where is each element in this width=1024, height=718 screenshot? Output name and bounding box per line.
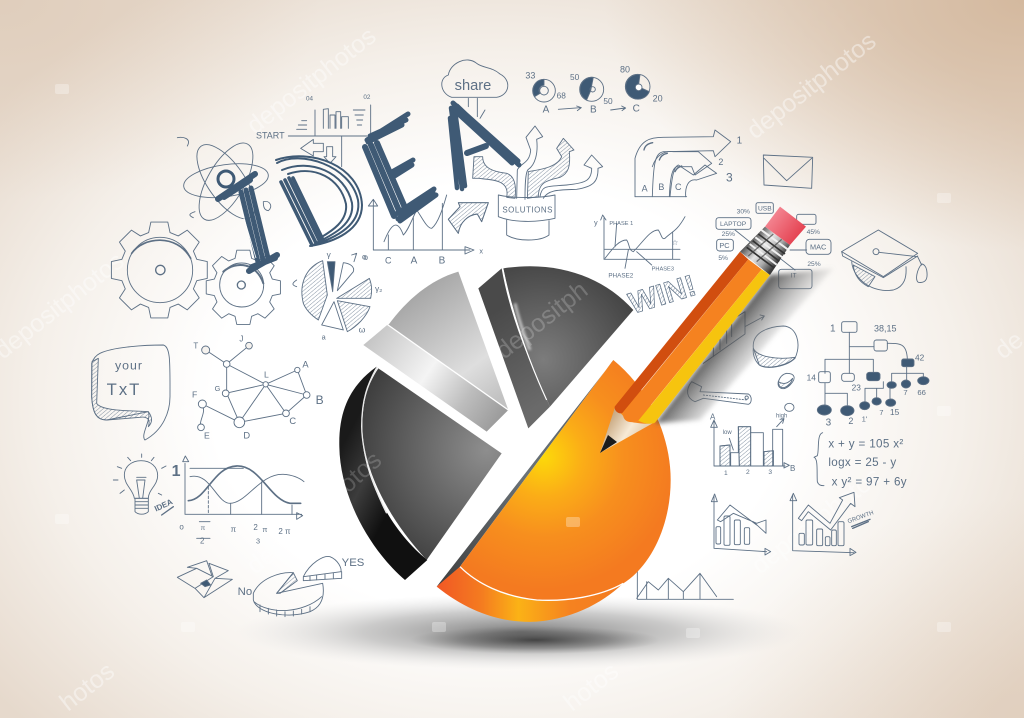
sketch: mountain chart xyxy=(637,570,733,599)
icon: share cloud xyxy=(442,60,508,118)
sketches: speech bubble, network, bulb, curves, box, pie xyxy=(92,335,365,617)
network diagram: C xyxy=(289,416,296,426)
donut charts: 80 xyxy=(620,65,630,75)
slice: orange xyxy=(437,360,671,622)
pie watermarks xyxy=(333,276,593,498)
pie chart xyxy=(339,266,671,622)
laptop labels: IT xyxy=(791,272,797,279)
org chart: 1 xyxy=(830,324,836,335)
donut charts: 20 xyxy=(653,94,663,104)
pie watermarks: otos xyxy=(333,446,387,498)
equations: x + y = 105 x² xyxy=(828,437,904,450)
donut charts: A xyxy=(543,105,550,116)
pie sketch: o xyxy=(363,252,368,262)
sketches: bar charts and equations xyxy=(710,403,907,556)
laptop labels: MAC xyxy=(810,242,827,251)
org chart: 66 xyxy=(917,388,926,397)
slice: dark left xyxy=(339,367,502,580)
hand drawn line chart: o xyxy=(362,252,367,261)
org chart: 23 xyxy=(852,383,861,393)
network diagram xyxy=(192,335,324,440)
bar chart: B xyxy=(790,464,795,473)
org chart: 14 xyxy=(807,373,816,383)
phase chart: PHASE 1 xyxy=(609,221,633,227)
bar chart: high xyxy=(776,413,787,419)
pie sketch: a xyxy=(322,332,327,341)
letter E xyxy=(365,114,436,221)
donut charts: 50 xyxy=(603,96,613,106)
donut charts: 33 xyxy=(525,70,535,80)
laptop labels: 5% xyxy=(718,255,728,262)
hand drawn line chart: x xyxy=(479,246,483,255)
icon: envelope xyxy=(763,155,813,188)
start chart xyxy=(256,94,371,167)
curves chart: 2 π xyxy=(278,527,291,536)
curves chart: π xyxy=(262,525,267,534)
letter D xyxy=(276,156,362,246)
org chart: 15 xyxy=(890,407,900,417)
ground shadow xyxy=(235,594,805,670)
icon: graduation cap xyxy=(842,230,927,291)
growth bar chart xyxy=(790,492,875,556)
equations: logx = 25 - y xyxy=(828,456,896,469)
curves chart: 3 xyxy=(256,536,260,545)
speech bubble: TxT xyxy=(107,380,141,399)
icon: small gear xyxy=(206,250,280,324)
network diagram: L xyxy=(264,369,269,379)
laptop labels: 30% xyxy=(737,208,750,215)
bar chart: low xyxy=(723,430,732,436)
solutions plant: SOLUTIONS xyxy=(502,206,553,215)
icon: cylinder chart xyxy=(753,326,798,389)
icon: ABC arrows: 3 xyxy=(726,171,733,185)
network diagram: T xyxy=(193,341,198,350)
pie watermarks: depositph xyxy=(490,276,593,365)
network diagram: J xyxy=(239,335,243,344)
laptop labels: PC xyxy=(719,241,730,250)
icon: open box xyxy=(177,561,232,598)
org chart xyxy=(807,322,929,429)
network diagram: E xyxy=(204,430,210,440)
org chart: 7 xyxy=(879,408,883,417)
start chart: START xyxy=(256,131,285,141)
equations: x y² = 97 + 6y xyxy=(832,476,907,489)
camera marks xyxy=(55,84,951,638)
org chart: 2 xyxy=(848,416,853,426)
speech bubble xyxy=(92,345,170,440)
sketches: gears, atom, start chart, pie sketch xyxy=(111,94,382,341)
phase chart: y xyxy=(594,218,598,227)
icon: light bulb: 1 xyxy=(172,463,181,480)
solutions plant xyxy=(473,126,603,240)
bar chart: 2 xyxy=(746,469,750,476)
curves chart: π xyxy=(201,525,206,532)
hand drawn line chart: C xyxy=(385,255,392,265)
phase chart xyxy=(594,215,685,279)
laptop labels: 25% xyxy=(722,231,735,238)
curves chart: 2 xyxy=(200,536,205,545)
donut charts xyxy=(525,65,663,116)
slice: light xyxy=(363,272,508,432)
icon: hatched arrow xyxy=(448,203,488,233)
pencil wood and lead xyxy=(600,407,655,453)
pie with slice: No xyxy=(238,586,252,598)
org chart: 3 xyxy=(826,418,832,429)
phase chart: ☆ xyxy=(672,238,678,247)
icon: atom xyxy=(177,135,271,228)
curves chart: π xyxy=(231,525,237,534)
network diagram: A xyxy=(302,359,309,369)
icon: ABC arrows: B xyxy=(658,182,664,192)
laptop labels: 25% xyxy=(807,261,821,268)
watermarks: depositphotos xyxy=(741,27,881,145)
icon: large gear xyxy=(111,222,207,318)
curves chart: o xyxy=(179,522,184,531)
equations xyxy=(814,433,907,489)
letter I xyxy=(218,171,277,271)
pie sketch xyxy=(293,249,382,341)
org chart: 38,15 xyxy=(874,324,896,334)
speech bubble: your xyxy=(115,358,143,372)
org chart: 7 xyxy=(903,388,908,397)
hand drawn line chart xyxy=(362,195,483,266)
laptop labels xyxy=(716,203,831,289)
start chart: 04 xyxy=(306,95,314,102)
icon: ABC arrows: C xyxy=(675,182,682,192)
laptop labels: LAPTOP xyxy=(720,221,747,228)
pencil body xyxy=(615,252,770,424)
bar chart: 3 xyxy=(768,469,772,476)
network diagram: B xyxy=(316,393,324,407)
donut charts: 68 xyxy=(557,91,566,101)
watermarks: hotos xyxy=(54,657,120,717)
icon: wrench xyxy=(688,382,751,404)
laptop labels: USB xyxy=(758,206,772,213)
icon: ABC arrows: A xyxy=(642,184,648,194)
icon: ABC arrows: 1 xyxy=(737,135,743,146)
start chart: 02 xyxy=(363,94,371,101)
curves chart: 2 xyxy=(253,523,258,532)
pie sketch: γ xyxy=(327,249,332,259)
network diagram: D xyxy=(243,430,250,440)
bar chart xyxy=(710,403,795,477)
network diagram: G xyxy=(215,384,221,393)
pencil ferrule xyxy=(740,227,790,275)
donut charts: C xyxy=(633,103,640,114)
donut charts: 50 xyxy=(570,72,580,82)
icon: share cloud: share xyxy=(455,78,491,94)
phase chart: PHASE2 xyxy=(608,272,634,279)
icon: light bulb xyxy=(113,454,181,515)
watermarks: depositphotos xyxy=(241,462,381,580)
network diagram: F xyxy=(192,390,197,400)
letter A xyxy=(450,103,519,189)
org chart: 42 xyxy=(915,353,925,363)
slice: dark upper xyxy=(478,266,633,428)
pie sketch: γ₂ xyxy=(375,284,382,294)
watermarks: hotos xyxy=(558,657,624,717)
pie with slice xyxy=(238,556,365,617)
laptop labels: 45% xyxy=(807,229,820,236)
growth bar chart: GROWTH xyxy=(847,510,875,525)
watermarks: depositphotos xyxy=(241,22,381,140)
win lettering: WIN! xyxy=(625,269,700,321)
hand drawn line chart: A xyxy=(411,255,418,266)
icon: ABC arrows xyxy=(635,130,743,197)
title: IDEA xyxy=(218,103,519,271)
curves chart xyxy=(179,456,304,545)
pencil eraser xyxy=(765,207,806,245)
sketches: arrows, envelope, cap, org chart, wrench xyxy=(625,130,929,429)
watermarks: depositphotos xyxy=(746,462,886,580)
bar chart: 1 xyxy=(724,470,728,477)
sketches: cloud, donuts, solutions plant, arrows xyxy=(362,60,685,279)
icon: ABC arrows: 2 xyxy=(718,157,723,167)
org chart: 1' xyxy=(862,415,868,424)
donut charts: B xyxy=(590,105,597,116)
falling bar chart xyxy=(711,494,771,555)
bar chart: A xyxy=(710,412,716,421)
pie sketch: ω xyxy=(359,325,366,335)
hand drawn line chart: B xyxy=(439,255,446,266)
pencil xyxy=(600,207,833,453)
phase chart: PHASE3 xyxy=(652,267,674,273)
pencil shadow xyxy=(655,268,833,423)
icon: light bulb: IDEA xyxy=(153,497,174,513)
isometric bars xyxy=(703,312,764,363)
pie with slice: YES xyxy=(342,557,365,569)
